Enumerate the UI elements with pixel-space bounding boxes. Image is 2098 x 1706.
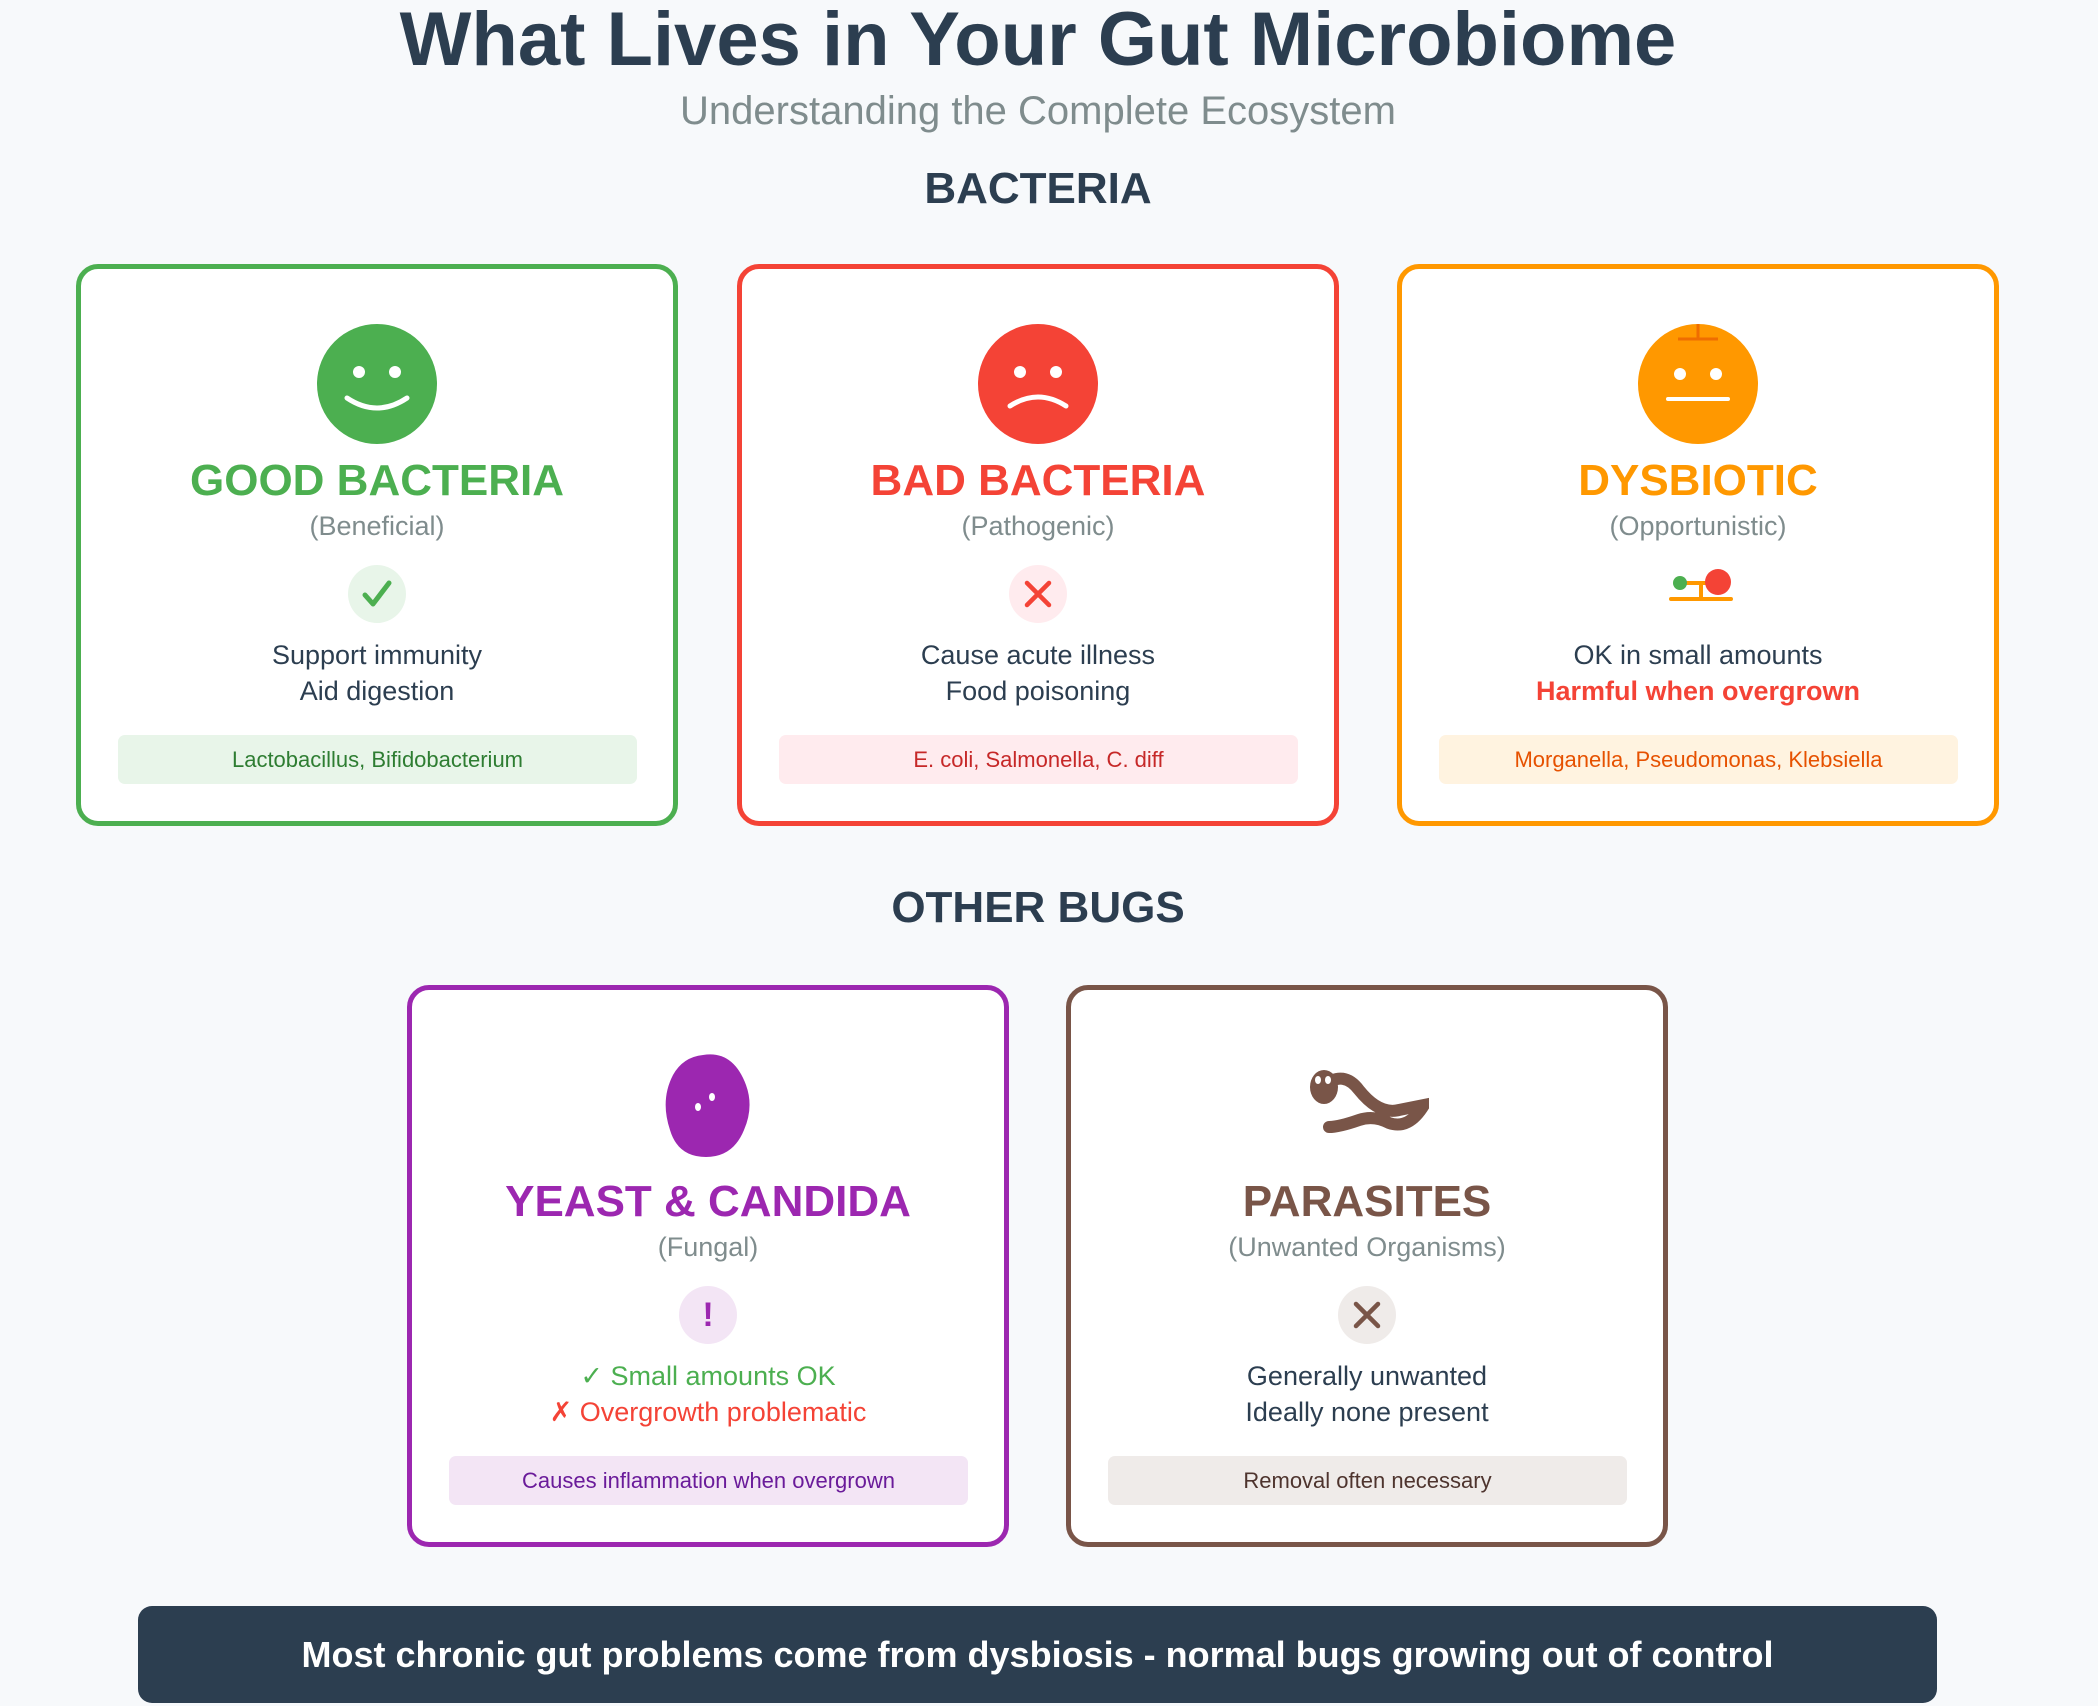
icon: cross [1009, 565, 1067, 623]
heading: GOOD BACTERIA [190, 456, 564, 505]
icon: sad face [978, 324, 1098, 444]
panel: yeast [407, 985, 1009, 1547]
icon: exclamation [679, 1286, 737, 1344]
text: Food poisoning [946, 676, 1130, 706]
text: Harmful when overgrown [1536, 676, 1860, 706]
tag [779, 735, 1298, 784]
text: Ideally none present [1245, 1397, 1489, 1427]
heading: YEAST & CANDIDA [505, 1177, 911, 1226]
subtitle: Understanding the Complete Ecosystem [680, 89, 1396, 133]
text: OK in small amounts [1573, 640, 1823, 670]
text [1536, 640, 1860, 706]
panel: bad bacteria [737, 264, 1339, 826]
heading: PARASITES [1243, 1177, 1491, 1226]
heading: bacteria: BACTERIA [924, 164, 1152, 213]
footer callout [138, 1606, 1937, 1703]
panel: parasites [1066, 985, 1668, 1547]
icon: neutral face [1638, 324, 1758, 444]
text [550, 1361, 866, 1427]
tag: Removal often necessary [1243, 1468, 1492, 1493]
icon: yeast blob [666, 1054, 750, 1157]
icon: check [348, 565, 406, 623]
heading: DYSBIOTIC [1578, 456, 1818, 505]
text: Generally unwanted [1247, 1361, 1487, 1391]
icon: balance [1669, 569, 1733, 601]
text [921, 640, 1155, 706]
text [272, 640, 482, 706]
icon: cross [1338, 1286, 1396, 1344]
tag: Causes inflammation when overgrown [522, 1468, 895, 1493]
tag [118, 735, 637, 784]
heading: other bugs: OTHER BUGS [891, 883, 1185, 932]
text [1245, 1361, 1489, 1427]
text: ✓ Small amounts OK [580, 1361, 836, 1391]
text: Cause acute illness [921, 640, 1155, 670]
text: ✗ Overgrowth problematic [550, 1397, 866, 1427]
subheading: (Opportunistic) [1609, 511, 1787, 541]
icon: worm [1310, 1070, 1429, 1133]
panel: dysbiotic [1397, 264, 1999, 826]
tag: E. coli, Salmonella, C. diff [913, 747, 1164, 772]
panel: good bacteria [76, 264, 678, 826]
tag [1108, 1456, 1627, 1505]
icon: exclamation: ! [702, 1296, 714, 1334]
footer callout: Most chronic gut problems come from dysbiosis - normal bugs growing out of control [301, 1634, 1774, 1675]
subheading: (Unwanted Organisms) [1228, 1232, 1506, 1262]
subheading: (Beneficial) [309, 511, 445, 541]
tag [449, 1456, 968, 1505]
heading: BAD BACTERIA [871, 456, 1205, 505]
tag: Morganella, Pseudomonas, Klebsiella [1514, 747, 1883, 772]
tag [1439, 735, 1958, 784]
subheading: (Fungal) [658, 1232, 758, 1262]
text: Support immunity [272, 640, 482, 670]
tag: Lactobacillus, Bifidobacterium [232, 747, 523, 772]
text: Aid digestion [300, 676, 454, 706]
subheading: (Pathogenic) [961, 511, 1115, 541]
icon: happy face [317, 324, 437, 444]
